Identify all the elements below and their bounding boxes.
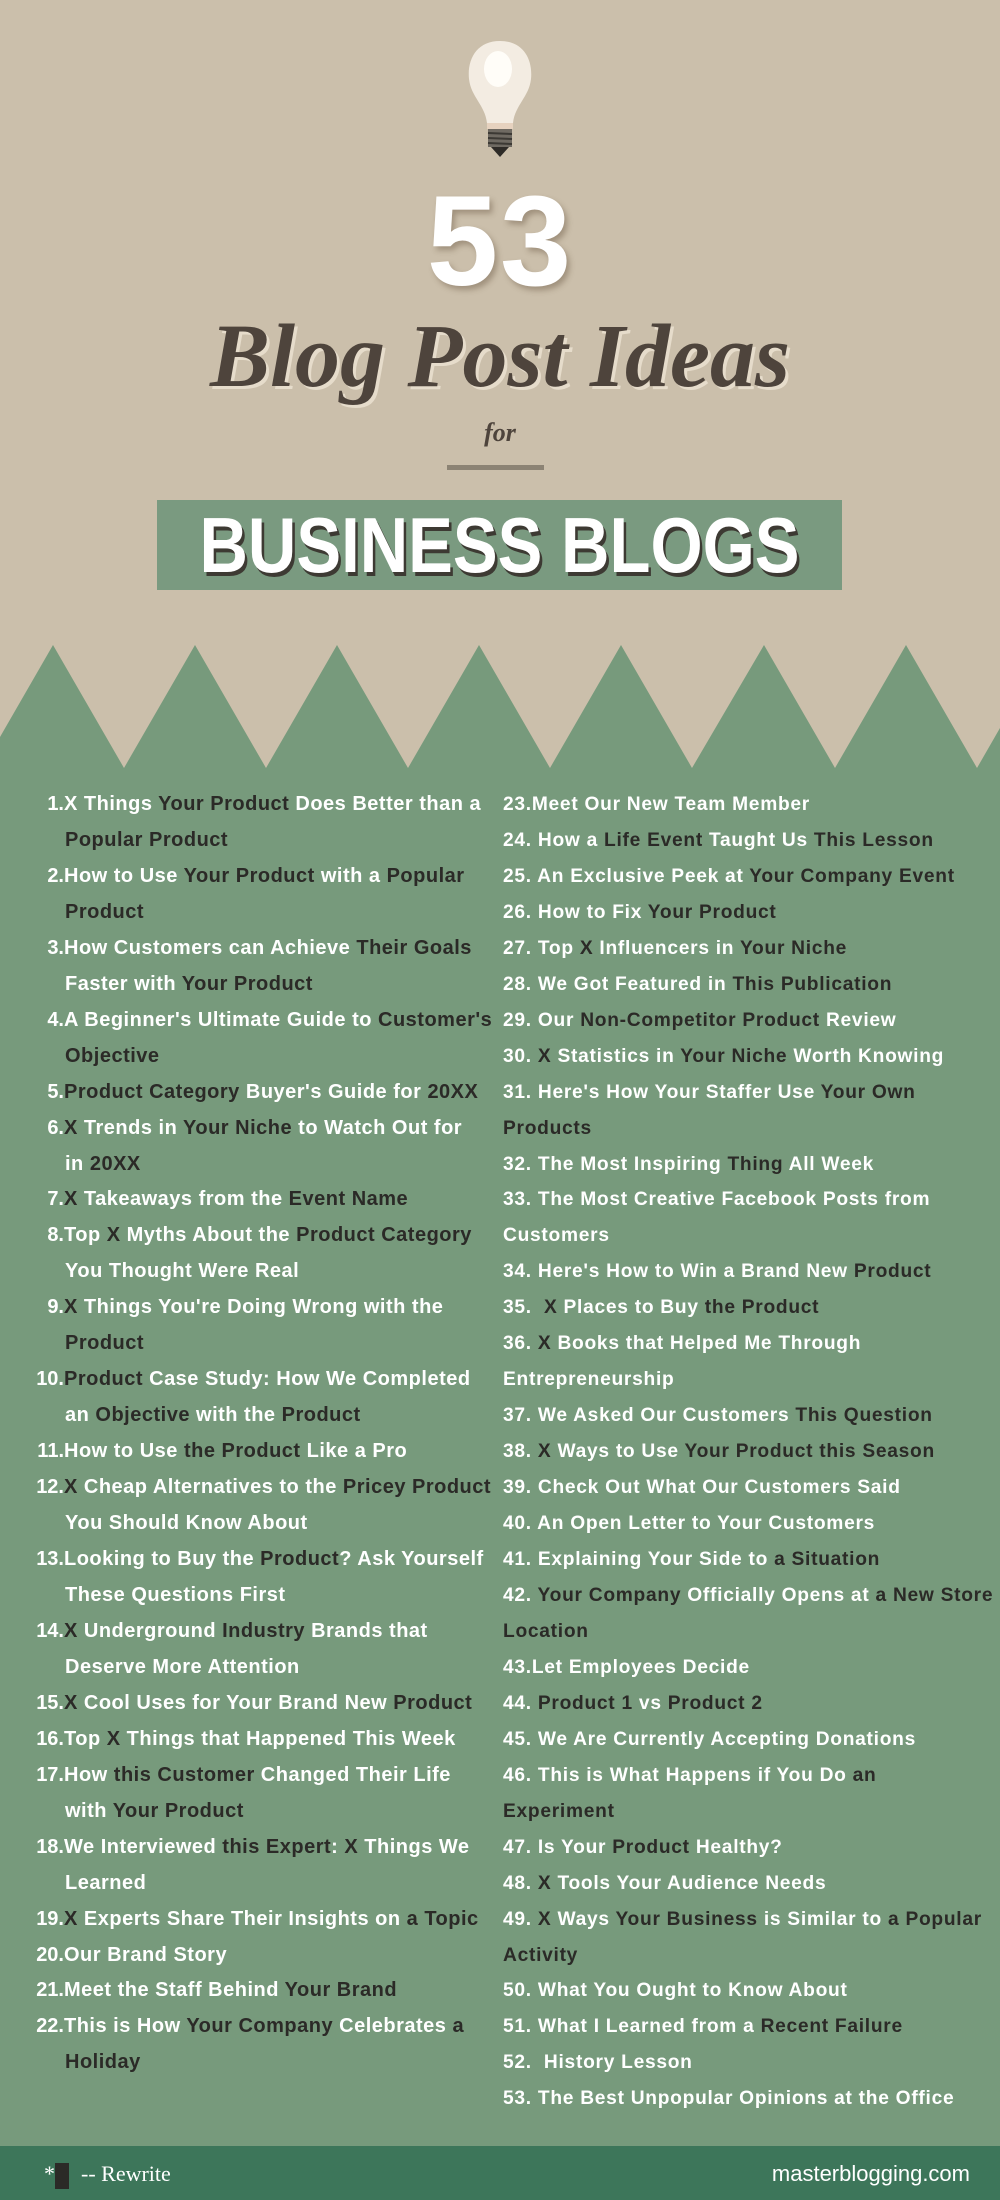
list: left column ideas 1-22: 13. — [36, 1548, 64, 1570]
list: left column ideas 1-22: Product — [65, 901, 144, 923]
list: left column ideas 1-22: Meet the Staff Behind Your Brand — [64, 1979, 397, 2001]
icon: light bulb — [468, 41, 532, 157]
list: right column ideas 23-53: 53. The Best Unpopular Opinions at the Office — [503, 2088, 954, 2109]
list: right column ideas 23-53: 35. X Places to Buy the Product — [503, 1297, 819, 1318]
divider line — [447, 465, 544, 470]
list: left column ideas 1-22: X Takeaways from the Event Name — [64, 1188, 408, 1210]
list: right column ideas 23-53 — [503, 794, 993, 2109]
list: left column ideas 1-22: 12. — [36, 1476, 64, 1498]
title: Blog Post Ideas: Blog Post Ideas — [210, 307, 790, 406]
list: left column ideas 1-22: 15. — [36, 1692, 64, 1714]
title number 53: 53 — [427, 170, 573, 313]
list: left column ideas 1-22: X Cheap Alternatives to the Pricey Product — [64, 1476, 491, 1498]
list: left column ideas 1-22: You Should Know About — [65, 1512, 308, 1534]
list: right column ideas 23-53: Entrepreneurship — [503, 1369, 674, 1390]
list: right column ideas 23-53: 30. X Statistics in Your Niche Worth Knowing — [503, 1046, 944, 1067]
list: right column ideas 23-53: 46. This is What Happens if You Do an — [503, 1765, 876, 1786]
list: right column ideas 23-53: 26. How to Fix Your Product — [503, 902, 777, 923]
list: right column ideas 23-53: 42. Your Company Officially Opens at a New Store — [503, 1585, 993, 1606]
list: left column ideas 1-22: 14. — [36, 1620, 64, 1642]
list: left column ideas 1-22: How Customers can Achieve Their Goals — [64, 937, 472, 959]
list: left column ideas 1-22 — [36, 793, 492, 2073]
list: left column ideas 1-22: X Cool Uses for Your Brand New Product — [64, 1692, 472, 1714]
list: left column ideas 1-22: X Things You're Doing Wrong with the — [64, 1296, 443, 1318]
list: left column ideas 1-22: 10. — [36, 1368, 64, 1390]
list: left column ideas 1-22: 6. — [47, 1117, 64, 1139]
banner: BUSINESS BLOGS: BUSINESS BLOGS — [199, 501, 800, 589]
footer: website: masterblogging.com — [772, 2161, 970, 2186]
list: right column ideas 23-53: Customers — [503, 1225, 610, 1246]
list: left column ideas 1-22: Faster with Your Product — [65, 973, 313, 995]
list: right column ideas 23-53: 41. Explaining Your Side to a Situation — [503, 1549, 880, 1570]
list: right column ideas 23-53: 34. Here's How to Win a Brand New Product — [503, 1261, 931, 1282]
list: right column ideas 23-53: 25. An Exclusive Peek at Your Company Event — [503, 866, 955, 887]
list: right column ideas 23-53: 51. What I Learned from a Recent Failure — [503, 2016, 903, 2037]
list: left column ideas 1-22: These Questions First — [65, 1584, 286, 1606]
list: left column ideas 1-22: 21. — [36, 1979, 64, 2001]
list: left column ideas 1-22: 18. — [36, 1836, 64, 1858]
list: right column ideas 23-53: 28. We Got Featured in This Publication — [503, 974, 892, 995]
footer legend: rewrite: * -- Rewrite — [44, 2161, 171, 2186]
list: right column ideas 23-53: 37. We Asked Our Customers This Question — [503, 1405, 933, 1426]
list: left column ideas 1-22: Product — [65, 1332, 144, 1354]
list: right column ideas 23-53: 49. X Ways Your Business is Similar to a Popular — [503, 1909, 982, 1930]
list: left column ideas 1-22: Our Brand Story — [64, 1944, 227, 1966]
list: left column ideas 1-22: 11. — [37, 1440, 64, 1462]
list: left column ideas 1-22: 4. — [47, 1009, 64, 1031]
list: left column ideas 1-22: 8. — [47, 1224, 64, 1246]
list: left column ideas 1-22: Objective — [65, 1045, 160, 1067]
list: right column ideas 23-53: Location — [503, 1621, 589, 1642]
list: left column ideas 1-22: You Thought Were Real — [65, 1260, 299, 1282]
list: left column ideas 1-22: X Things Your Product Does Better than a — [64, 793, 481, 815]
list: left column ideas 1-22: 1. — [47, 793, 64, 815]
list: left column ideas 1-22: This is How Your Company Celebrates a — [64, 2015, 464, 2037]
list: left column ideas 1-22: Looking to Buy the Product? Ask Yourself — [64, 1548, 484, 1570]
list: right column ideas 23-53: 47. Is Your Product Healthy? — [503, 1837, 783, 1858]
list: right column ideas 23-53: Experiment — [503, 1801, 615, 1822]
list: right column ideas 23-53: 40. An Open Letter to Your Customers — [503, 1513, 875, 1534]
list: right column ideas 23-53: 32. The Most Inspiring Thing All Week — [503, 1154, 874, 1175]
list: left column ideas 1-22: Product Category Buyer's Guide for 20XX — [64, 1081, 478, 1103]
list: right column ideas 23-53: Products — [503, 1118, 592, 1139]
list: left column ideas 1-22: Popular Product — [65, 829, 228, 851]
list: right column ideas 23-53: 45. We Are Currently Accepting Donations — [503, 1729, 916, 1750]
list: left column ideas 1-22: Learned — [65, 1872, 146, 1894]
list: right column ideas 23-53: 43.Let Employees Decide — [503, 1657, 750, 1678]
list: right column ideas 23-53: 39. Check Out What Our Customers Said — [503, 1477, 901, 1498]
list: left column ideas 1-22: 20. — [36, 1944, 64, 1966]
list: left column ideas 1-22: 16. — [36, 1728, 64, 1750]
list: right column ideas 23-53: 48. X Tools Your Audience Needs — [503, 1873, 826, 1894]
list: right column ideas 23-53: 27. Top X Influencers in Your Niche — [503, 938, 847, 959]
list: left column ideas 1-22: Deserve More Attention — [65, 1656, 300, 1678]
list: left column ideas 1-22: 22. — [36, 2015, 64, 2037]
list: left column ideas 1-22: X Experts Share Their Insights on a Topic — [64, 1908, 479, 1930]
list: left column ideas 1-22: in 20XX — [65, 1153, 141, 1175]
list: left column ideas 1-22: We Interviewed this Expert: X Things We — [64, 1836, 470, 1858]
list: left column ideas 1-22: an Objective with the Product — [65, 1404, 361, 1426]
list: left column ideas 1-22: X Underground Industry Brands that — [64, 1620, 428, 1642]
list: left column ideas 1-22: 17. — [36, 1764, 64, 1786]
list: right column ideas 23-53: 23.Meet Our New Team Member — [503, 794, 810, 815]
list: right column ideas 23-53: 33. The Most Creative Facebook Posts from — [503, 1189, 930, 1210]
footer bar — [0, 2146, 1000, 2200]
list: right column ideas 23-53: 29. Our Non-Competitor Product Review — [503, 1010, 896, 1031]
subtitle: for: for — [484, 418, 516, 447]
list: left column ideas 1-22: 19. — [36, 1908, 64, 1930]
list: left column ideas 1-22: Holiday — [65, 2051, 141, 2073]
list: right column ideas 23-53: Activity — [503, 1944, 578, 1966]
list: left column ideas 1-22: A Beginner's Ultimate Guide to Customer's — [64, 1009, 492, 1031]
list: right column ideas 23-53: 31. Here's How Your Staffer Use Your Own — [503, 1082, 916, 1103]
list: left column ideas 1-22: How to Use the Product Like a Pro — [64, 1440, 407, 1462]
list: left column ideas 1-22: 9. — [47, 1296, 64, 1318]
list: right column ideas 23-53: 50. What You Ought to Know About — [503, 1980, 848, 2001]
list: left column ideas 1-22: Product Case Study: How We Completed — [64, 1368, 471, 1390]
list: left column ideas 1-22: Top X Things that Happened This Week — [64, 1728, 456, 1750]
list: left column ideas 1-22: 7. — [47, 1188, 64, 1210]
list: left column ideas 1-22: 3. — [47, 937, 64, 959]
list: right column ideas 23-53: 24. How a Life Event Taught Us This Lesson — [503, 830, 934, 851]
list: left column ideas 1-22: How to Use Your Product with a Popular — [64, 865, 465, 887]
list: left column ideas 1-22: X Trends in Your Niche to Watch Out for — [64, 1117, 462, 1139]
list: left column ideas 1-22: 5. — [47, 1081, 64, 1103]
list: left column ideas 1-22: How this Customer Changed Their Life — [64, 1764, 451, 1786]
list: left column ideas 1-22: with Your Product — [65, 1800, 244, 1822]
list: right column ideas 23-53: 38. X Ways to Use Your Product this Season — [503, 1441, 935, 1462]
list: left column ideas 1-22: 2. — [47, 865, 64, 887]
list: left column ideas 1-22: Top X Myths About the Product Category — [64, 1224, 472, 1246]
list: right column ideas 23-53: 44. Product 1 vs Product 2 — [503, 1693, 763, 1714]
list: right column ideas 23-53: 52. History Lesson — [503, 2052, 693, 2073]
list: right column ideas 23-53: 36. X Books that Helped Me Through — [503, 1333, 861, 1354]
